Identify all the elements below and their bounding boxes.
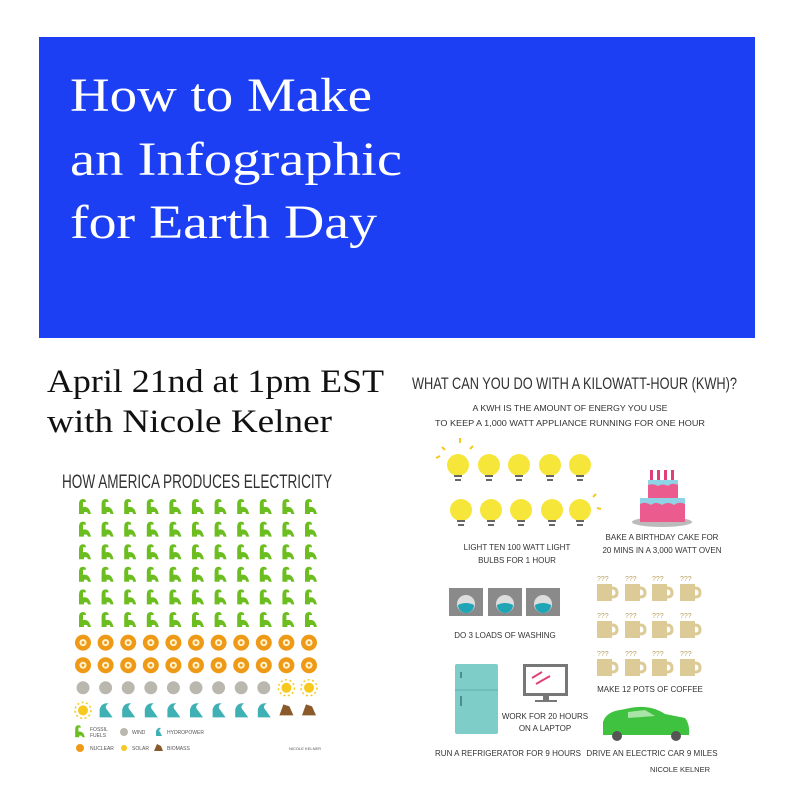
caption: bulbs: BULBS FOR 1 HOUR — [478, 556, 556, 565]
title: an Infographic — [70, 133, 402, 186]
caption: cake: BAKE A BIRTHDAY CAKE FOR — [606, 533, 719, 542]
kwh subtitle: TO KEEP A 1,000 WATT APPLIANCE RUNNING FOR ONE HOUR — [435, 418, 705, 428]
caption: washing: DO 3 LOADS OF WASHING — [454, 631, 556, 640]
icon: electric car — [603, 707, 689, 741]
event details: with Nicole Kelner — [47, 404, 332, 440]
legend: NICOLE KELNER — [289, 746, 321, 751]
caption: refrigerator: RUN A REFRIGERATOR FOR 9 HOURS — [435, 749, 581, 758]
header panel — [39, 37, 755, 338]
caption: car: DRIVE AN ELECTRIC CAR 9 MILES — [586, 749, 718, 758]
icon: refrigerator — [455, 664, 498, 734]
legend: BIOMASS — [167, 746, 190, 752]
panel: kilowatt-hour — [412, 374, 737, 774]
legend: NUCLEAR — [90, 746, 114, 752]
icon: coffee mugs — [597, 576, 700, 676]
legend: FOSSIL — [90, 727, 108, 733]
caption: cake: 20 MINS IN A 3,000 WATT OVEN — [602, 546, 722, 555]
icon: laptop monitor — [523, 664, 568, 702]
kwh subtitle: A KWH IS THE AMOUNT OF ENERGY YOU USE — [472, 403, 668, 413]
icon: washing machines — [449, 588, 560, 616]
caption: bulbs: LIGHT TEN 100 WATT LIGHT — [464, 543, 570, 552]
event details: April 21nd at 1pm EST — [47, 364, 384, 400]
legend — [75, 725, 321, 752]
icon: light bulbs — [436, 438, 601, 526]
legend: WIND — [132, 730, 146, 736]
panel: how america produces electricity — [62, 472, 332, 752]
title: How to Make — [70, 69, 372, 122]
legend: HYDROPOWER — [167, 730, 204, 736]
legend: FUELS — [90, 733, 107, 739]
legend: SOLAR — [132, 746, 149, 752]
title: for Earth Day — [70, 196, 377, 249]
credit: NICOLE KELNER — [650, 765, 711, 774]
icon: birthday cake — [632, 470, 692, 527]
icon grid — [75, 499, 317, 718]
caption: laptop: WORK FOR 20 HOURS — [502, 712, 588, 721]
caption: laptop: ON A LAPTOP — [519, 724, 571, 733]
chart title: HOW AMERICA PRODUCES ELECTRICITY — [62, 472, 332, 493]
caption: coffee: MAKE 12 POTS OF COFFEE — [597, 685, 703, 694]
